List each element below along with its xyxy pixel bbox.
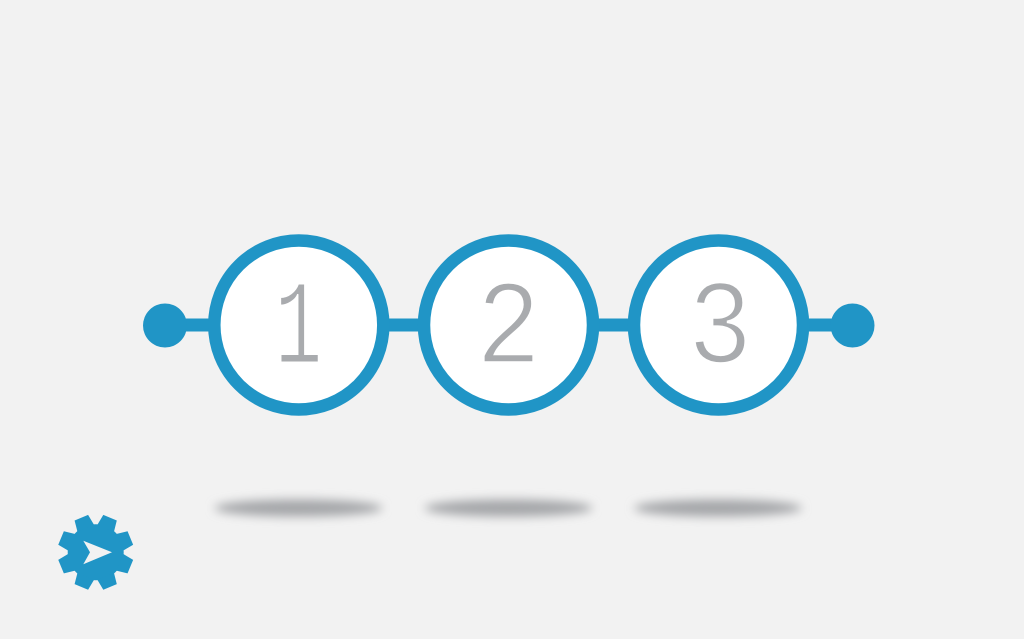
step 3 circle: 3 xyxy=(688,264,752,399)
icon: gear logo with arrow xyxy=(58,514,134,590)
shadow under step 3 xyxy=(634,500,802,516)
step 2 circle: 2 xyxy=(476,263,541,399)
step 2 circle xyxy=(424,240,593,410)
step 1 circle: 1 xyxy=(275,262,322,399)
end dot xyxy=(830,304,874,348)
step 3 circle xyxy=(634,240,803,410)
start dot xyxy=(143,304,187,348)
shadow under step 2 xyxy=(424,500,592,516)
shadow under step 1 xyxy=(214,500,382,516)
step 1 circle xyxy=(214,240,383,410)
connector line xyxy=(165,318,853,332)
